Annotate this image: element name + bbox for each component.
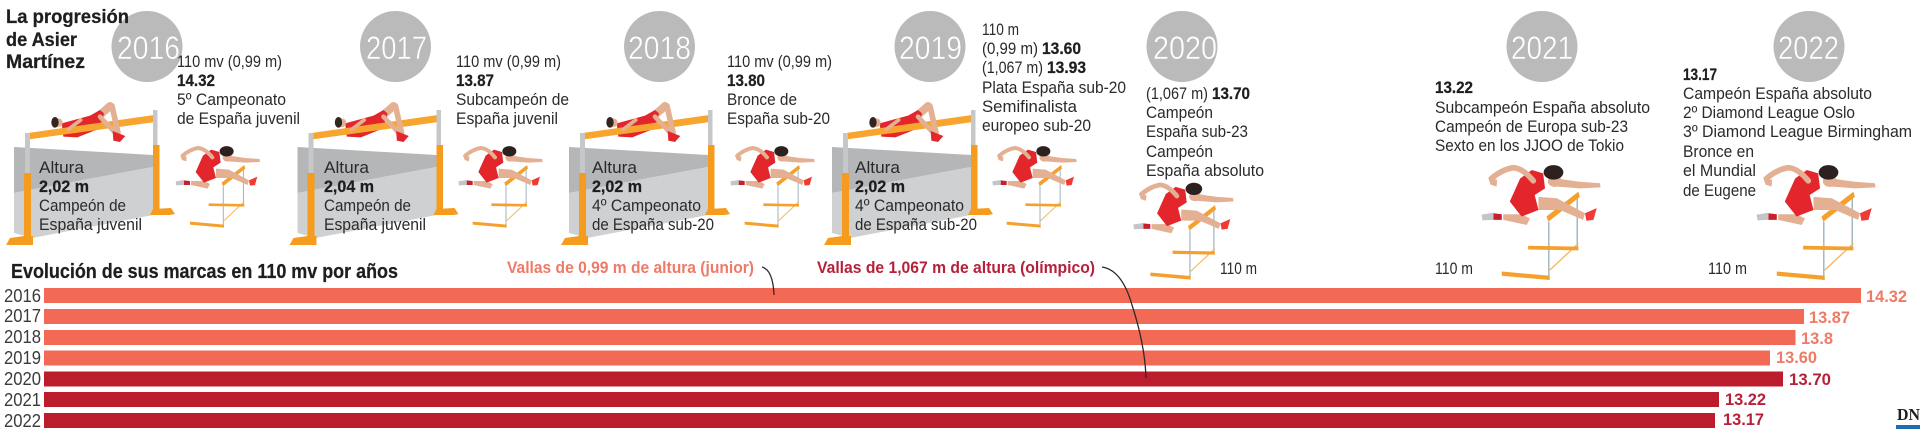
year badge 2021: 2021 bbox=[1511, 30, 1573, 66]
hurdles results 2022: 2º Diamond League Oslo bbox=[1683, 103, 1855, 122]
hurdles results 2019: (1,067 m) bbox=[982, 58, 1043, 77]
year badge 2016: 2016 bbox=[117, 30, 180, 66]
bar 2021: 2021 bbox=[4, 390, 41, 410]
bar 2016: 14.32 bbox=[1866, 287, 1907, 306]
high jump results 2017: Altura bbox=[324, 158, 370, 177]
icon: hurdler 2020 bbox=[1133, 183, 1234, 280]
high jump results 2017: Campeón de bbox=[324, 196, 411, 215]
year badge 2017 bbox=[360, 11, 431, 82]
high jump results 2017: España juvenil bbox=[324, 215, 426, 234]
hurdles results 2019: europeo sub-20 bbox=[982, 116, 1091, 135]
title: de Asier bbox=[6, 29, 77, 51]
high jump results 2018 bbox=[592, 158, 714, 234]
icon: hurdler 2018 bbox=[730, 146, 815, 228]
hurdles results 2019: (0,99 m) bbox=[982, 39, 1038, 58]
panel: 2016 bbox=[6, 11, 300, 245]
hurdles results 2016: 14.32 bbox=[177, 71, 215, 90]
hurdles results 2020: (1,067 m) bbox=[1146, 84, 1208, 103]
hurdle height label 2020: 110 m bbox=[1220, 259, 1257, 278]
bar 2018: 13.8 bbox=[1801, 329, 1833, 348]
bar 2019 bbox=[4, 348, 1817, 368]
hurdles results 2020: 13.70 bbox=[1212, 84, 1250, 103]
bar 2017 bbox=[4, 306, 1850, 327]
bar 2017: 2017 bbox=[4, 306, 41, 326]
year badge 2022: 2022 bbox=[1778, 30, 1839, 66]
bar 2018 bbox=[4, 327, 1833, 348]
hurdles results 2021: Sexto en los JJOO de Tokio bbox=[1435, 136, 1624, 155]
year badge 2018: 2018 bbox=[628, 30, 691, 66]
hurdles results 2021: 13.22 bbox=[1435, 78, 1473, 97]
bar chart: 110 mv marks by year bbox=[4, 286, 1907, 431]
hurdles results 2022: 13.17 bbox=[1683, 65, 1717, 84]
hurdles results 2019: Plata España sub-20 bbox=[982, 78, 1126, 97]
year badge 2022 bbox=[1774, 11, 1844, 82]
high jump results 2018: 4º Campeonato bbox=[592, 196, 701, 215]
icon: hurdler 2019 bbox=[992, 146, 1077, 228]
icon: high jumper 2019 bbox=[824, 106, 993, 245]
hurdles results 2020 bbox=[1146, 84, 1264, 180]
hurdles results 2018: España sub-20 bbox=[727, 109, 830, 128]
hurdles results 2018: 110 mv (0,99 m) bbox=[727, 52, 832, 71]
hurdles results 2017 bbox=[456, 52, 569, 128]
icon: hurdler 2017 bbox=[458, 146, 543, 228]
high jump results 2016: 2,02 m bbox=[39, 177, 89, 196]
year badge 2020: 2020 bbox=[1153, 30, 1217, 66]
hurdles results 2021 bbox=[1435, 78, 1650, 155]
chart heading: Evolución de sus marcas en 110 mv por años bbox=[11, 261, 398, 283]
icon: hurdler 2016 bbox=[176, 146, 260, 228]
hurdles results 2017: España juvenil bbox=[456, 109, 558, 128]
bar 2022: 13.17 bbox=[1723, 410, 1764, 429]
high jump results 2018: 2,02 m bbox=[592, 177, 642, 196]
year badge 2020 bbox=[1146, 11, 1218, 82]
high jump results 2016 bbox=[39, 158, 142, 234]
legend: olympic hurdles: Vallas de 1,067 m de altura (olímpico) bbox=[817, 258, 1095, 277]
hurdles results 2019: 110 m bbox=[982, 20, 1019, 39]
bar 2020: 2020 bbox=[4, 369, 41, 389]
hurdles results 2016 bbox=[177, 52, 300, 128]
hurdles results 2020: España sub-23 bbox=[1146, 122, 1248, 141]
high jump results 2016: Altura bbox=[39, 158, 85, 177]
title: Martínez bbox=[6, 51, 85, 73]
high jump results 2019: Altura bbox=[855, 158, 901, 177]
hurdles results 2020: España absoluto bbox=[1146, 161, 1264, 180]
hurdles results 2022 bbox=[1683, 65, 1912, 200]
hurdles results 2016: 5º Campeonato bbox=[177, 90, 286, 109]
hurdles results 2021: Campeón de Europa sub-23 bbox=[1435, 117, 1628, 136]
hurdles results 2022: Bronce en bbox=[1683, 142, 1754, 161]
legend: olympic hurdles bbox=[817, 258, 1146, 378]
panel: 2019 bbox=[824, 11, 1126, 245]
hurdles results 2019: 13.93 bbox=[1047, 58, 1086, 77]
hurdles results 2018: 13.80 bbox=[727, 71, 765, 90]
hurdles results 2017: Subcampeón de bbox=[456, 90, 569, 109]
year badge 2016 bbox=[112, 11, 182, 82]
hurdles results 2020: Campeón bbox=[1146, 142, 1213, 161]
legend: junior hurdles: Vallas de 0,99 m de altura (junior) bbox=[507, 258, 754, 277]
title: La progresión bbox=[6, 6, 129, 28]
hurdle height label 2021: 110 m bbox=[1435, 259, 1473, 278]
hurdles results 2022: Campeón España absoluto bbox=[1683, 84, 1872, 103]
bar 2020 bbox=[4, 369, 1831, 389]
high jump results 2016: Campeón de bbox=[39, 196, 126, 215]
icon: high jumper 2018 bbox=[561, 106, 730, 245]
bar 2019: 2019 bbox=[4, 348, 41, 368]
high jump results 2018: Altura bbox=[592, 158, 638, 177]
hurdle height label 2022: 110 m bbox=[1708, 259, 1747, 278]
bar 2022: 2022 bbox=[4, 411, 41, 431]
hurdles results 2019: Semifinalista bbox=[982, 97, 1078, 116]
panel: 2018 bbox=[561, 11, 832, 245]
high jump results 2016: España juvenil bbox=[39, 215, 142, 234]
year badge 2018 bbox=[624, 11, 695, 82]
hurdles results 2016: de España juvenil bbox=[177, 109, 300, 128]
bar 2016: 2016 bbox=[4, 286, 41, 306]
hurdles results 2022: de Eugene bbox=[1683, 181, 1756, 200]
icon: hurdler 2021 bbox=[1482, 165, 1600, 280]
year badge 2019: 2019 bbox=[899, 30, 962, 66]
hurdles results 2020: Campeón bbox=[1146, 103, 1213, 122]
panel: 2021 bbox=[1435, 11, 1650, 280]
year badge 2017: 2017 bbox=[366, 30, 427, 66]
hurdles results 2016: 110 mv (0,99 m) bbox=[177, 52, 282, 71]
bar 2022 bbox=[4, 410, 1764, 431]
icon: high jumper 2016 bbox=[6, 106, 175, 245]
hurdles results 2019: 13.60 bbox=[1042, 39, 1081, 58]
high jump results 2018: de España sub-20 bbox=[592, 215, 714, 234]
bar 2016 bbox=[4, 286, 1907, 306]
panel: 2022 bbox=[1683, 11, 1912, 280]
bar 2018: 2018 bbox=[4, 327, 41, 347]
hurdles results 2021: Subcampeón España absoluto bbox=[1435, 98, 1650, 117]
hurdles results 2018 bbox=[727, 52, 832, 128]
icon: hurdler 2022 bbox=[1757, 165, 1876, 280]
year badge 2019 bbox=[894, 11, 966, 82]
bar 2017: 13.87 bbox=[1809, 308, 1850, 327]
hurdles results 2017: 110 mv (0,99 m) bbox=[456, 52, 561, 71]
bar 2019: 13.60 bbox=[1776, 348, 1817, 367]
year badge 2021 bbox=[1506, 11, 1578, 82]
bar 2020: 13.70 bbox=[1789, 370, 1831, 389]
hurdles results 2017: 13.87 bbox=[456, 71, 494, 90]
hurdles results 2018: Bronce de bbox=[727, 90, 797, 109]
hurdles results 2022: el Mundial bbox=[1683, 161, 1756, 180]
icon: high jumper 2017 bbox=[290, 106, 458, 245]
panel: 2017 bbox=[290, 11, 569, 245]
high jump results 2017: 2,04 m bbox=[324, 177, 374, 196]
high jump results 2019 bbox=[855, 158, 977, 234]
legend: junior hurdles bbox=[507, 258, 774, 295]
panel: 2020 bbox=[1133, 11, 1264, 280]
title bbox=[6, 6, 129, 73]
hurdles results 2019 bbox=[982, 20, 1126, 135]
bar 2021 bbox=[4, 390, 1766, 410]
high jump results 2019: de España sub-20 bbox=[855, 215, 977, 234]
high jump results 2019: 2,02 m bbox=[855, 177, 905, 196]
high jump results 2019: 4º Campeonato bbox=[855, 196, 964, 215]
bar 2021: 13.22 bbox=[1725, 390, 1766, 409]
high jump results 2017 bbox=[324, 158, 426, 234]
